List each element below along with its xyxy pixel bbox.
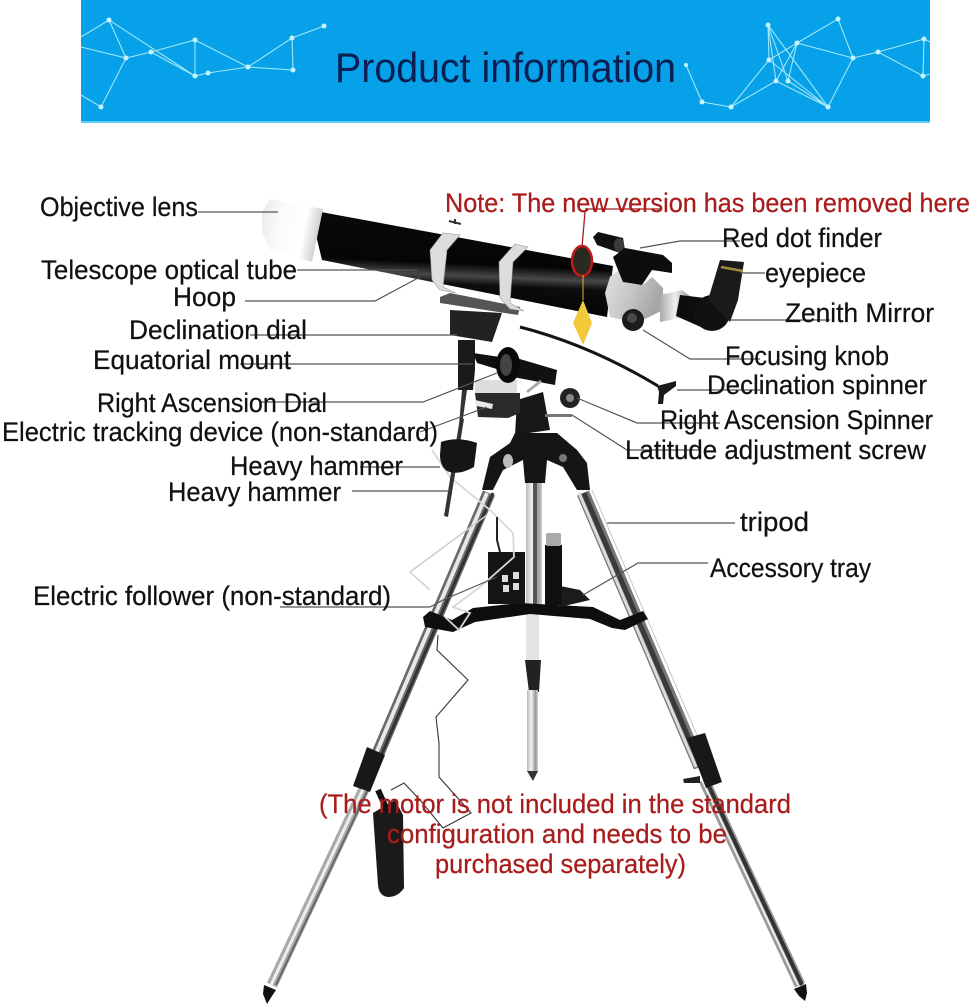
label: Electric follower <box>33 577 497 611</box>
label: Red dot finder <box>640 223 882 253</box>
focusing knob <box>622 309 644 331</box>
label: Hoop <box>173 277 420 312</box>
label: Accessory tray <box>583 553 872 595</box>
note: motor not included <box>319 789 791 879</box>
label: Focusing knob: Focusing knob <box>725 341 889 371</box>
counterweight and shaft <box>440 418 477 517</box>
banner constellation left <box>81 18 326 110</box>
label: Objective lens: Objective lens <box>40 192 198 222</box>
banner: product information <box>81 0 930 123</box>
dew shield <box>262 199 323 262</box>
label: tripod: tripod <box>740 507 809 537</box>
cables <box>391 450 514 828</box>
leg clamps and feet <box>263 733 807 1004</box>
slow motion cable <box>520 327 676 404</box>
accessory tray <box>423 586 648 632</box>
accessory eyepiece <box>545 533 562 605</box>
centre column <box>525 470 542 781</box>
telescope illustration <box>262 199 807 1004</box>
label: Electric tracking device <box>2 407 487 447</box>
note: motor not included: configuration and needs to be <box>387 819 727 849</box>
label: Focusing knob <box>643 330 889 371</box>
label: Latitude adjustment screw: Latitude adjustment screw <box>625 435 927 465</box>
label: Hoop: Hoop <box>173 282 236 312</box>
red dot finder <box>593 232 672 285</box>
banner title: Product information <box>335 44 676 91</box>
tripod head <box>482 433 590 490</box>
label: Equatorial mount: Equatorial mount <box>93 345 292 375</box>
label: Electric tracking device: Electric tracking device (non-standard) <box>2 417 438 447</box>
zenith mirror and eyepiece <box>676 260 744 331</box>
label: Right Ascension Spinner <box>577 398 933 435</box>
control box <box>488 552 525 604</box>
label: eyepiece: eyepiece <box>765 258 866 288</box>
note: motor not included: (The motor is not included in the standard <box>319 789 791 819</box>
label: Heavy hammer lower: Heavy hammer <box>168 477 341 507</box>
label: Right Ascension Dial: Right Ascension Dial <box>97 388 327 418</box>
label: Accessory tray: Accessory tray <box>710 553 872 583</box>
label: Zenith Mirror: Zenith Mirror <box>785 298 934 328</box>
label: Red dot finder: Red dot finder <box>722 223 882 253</box>
label: Heavy hammer upper: Heavy hammer <box>230 451 403 481</box>
equatorial mount <box>440 293 580 435</box>
red note marker <box>572 209 660 345</box>
banner constellation right <box>684 16 930 110</box>
label: Electric follower: Electric follower (non-standard) <box>33 581 391 611</box>
label: Latitude adjustment screw <box>572 415 927 465</box>
note: motor not included: purchased separately) <box>435 849 686 879</box>
label: Telescope optical tube: Telescope optical tube <box>41 255 297 285</box>
tube rings <box>430 219 528 311</box>
tripod legs <box>271 490 802 985</box>
hand controller <box>373 790 404 897</box>
label: Declination dial: Declination dial <box>129 315 307 345</box>
focuser <box>605 267 690 323</box>
label: Right Ascension Dial <box>97 373 497 418</box>
label: Declination spinner: Declination spinner <box>707 370 927 400</box>
optical tube <box>310 210 613 317</box>
label: Right Ascension Spinner: Right Ascension Spinner <box>660 405 933 435</box>
